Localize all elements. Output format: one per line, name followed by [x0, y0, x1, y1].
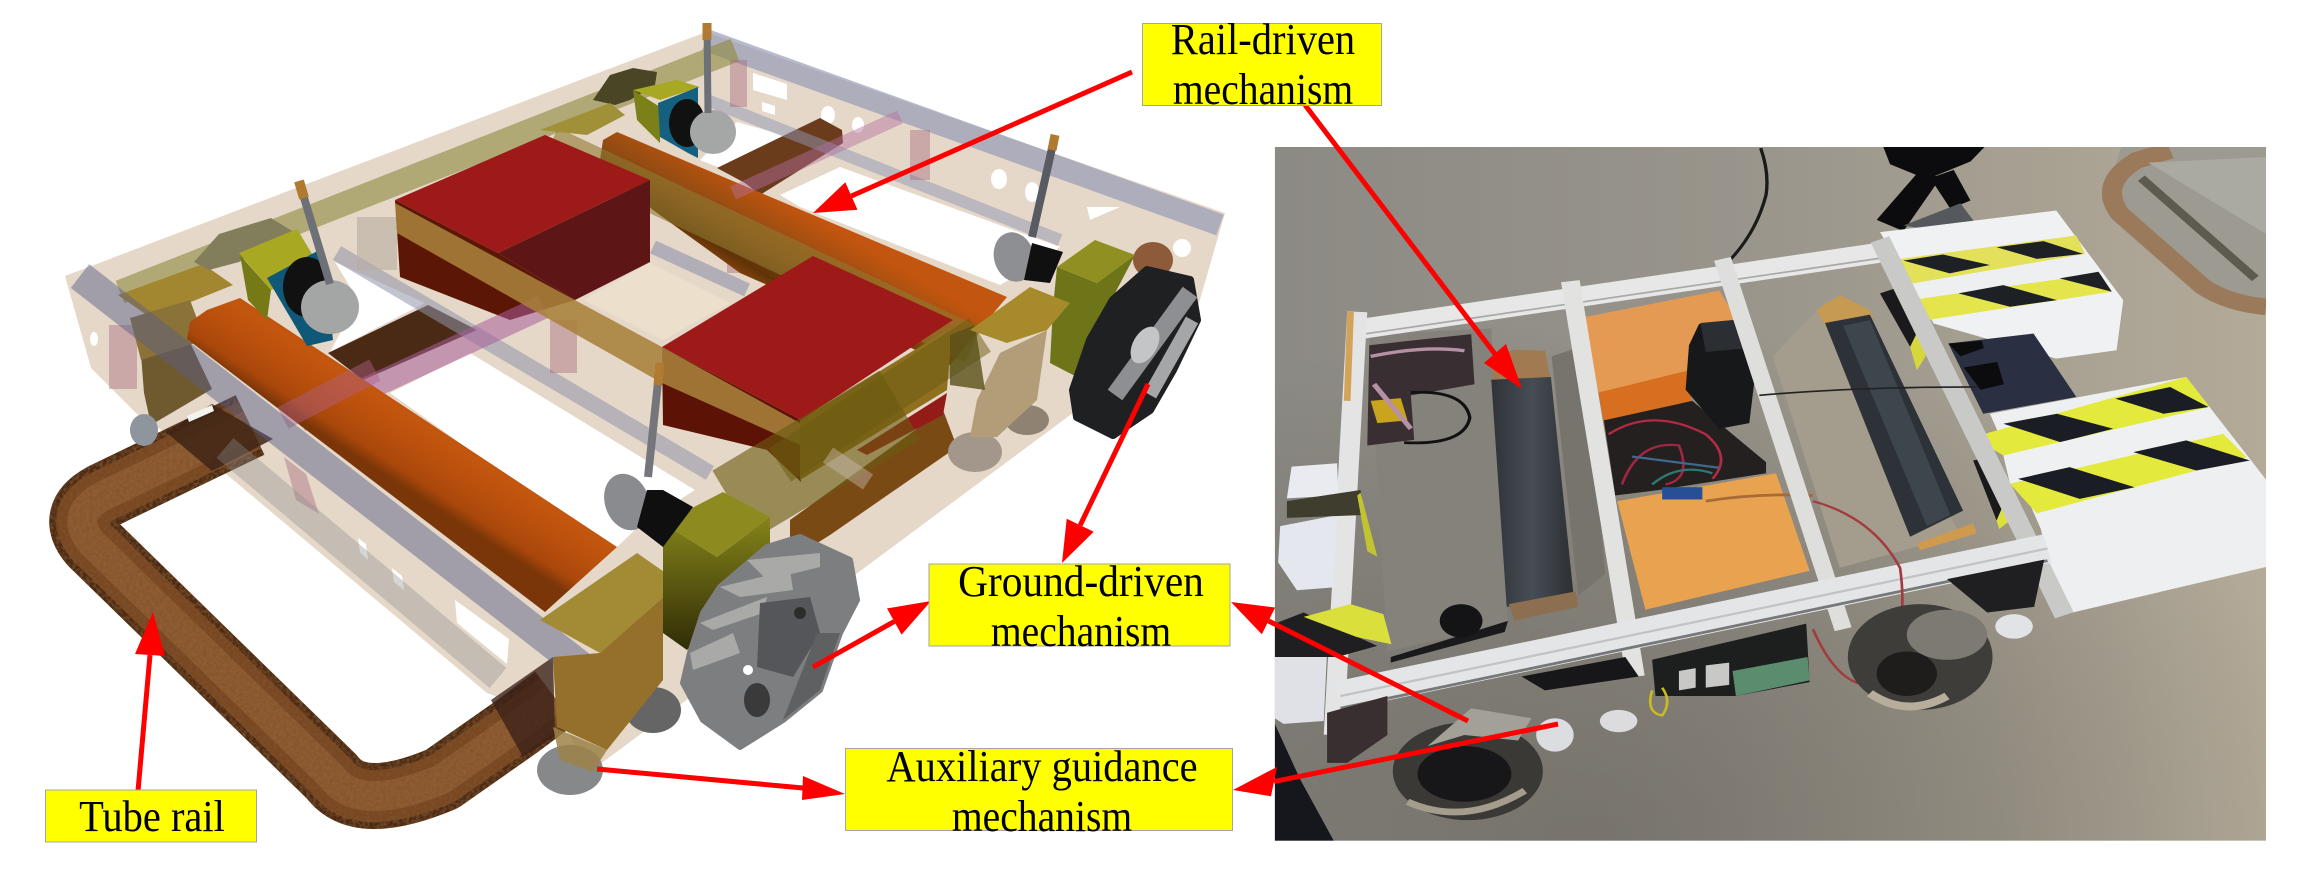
front left blue beam [80, 276, 600, 681]
top motor unit [540, 23, 736, 158]
shaded tube under body [166, 404, 273, 471]
front mecanum wheel [683, 537, 857, 747]
label: Tube rail [46, 790, 256, 842]
label: Ground-driven mechanism: Ground-driven [958, 558, 1204, 606]
pink crossing beams [300, 117, 900, 420]
front cross beam and rail ends [733, 335, 980, 505]
red box 1 [395, 135, 650, 320]
ground background [1275, 147, 2266, 841]
arrow: front wheel to ground-driven [813, 601, 931, 667]
label: Auxiliary guidance mechanism: mechanism [952, 793, 1132, 842]
top right bumper [1880, 210, 2123, 370]
left white blocks [1275, 463, 1391, 724]
panel: photo of the prototype [1275, 147, 2267, 841]
label: Tube rail: Tube rail [79, 792, 225, 841]
red box 2 [662, 256, 953, 482]
wall holes [90, 73, 1191, 664]
translucent body [65, 32, 1225, 770]
arrow: tube rail label to tube [135, 612, 165, 791]
rear tube rail sections [328, 118, 957, 560]
back and interior frame rails [120, 40, 1220, 473]
arrow: guide wheel to auxiliary label [597, 769, 845, 800]
right mecanum wheel [1073, 270, 1197, 435]
tube rail loop [82, 425, 555, 796]
tan cross beam [395, 203, 800, 445]
black cylinder right [1816, 295, 1976, 550]
camera stand [1877, 147, 1985, 231]
arrow: rail-driven to photo cylinder [1305, 105, 1522, 389]
dark ground corner [1275, 724, 1334, 841]
arrow: rail-driven to CAD cylinder [813, 72, 1132, 213]
manhole ring [2110, 147, 2266, 307]
aluminium frame bars [1334, 239, 2064, 735]
pink band on front cylinder [283, 370, 375, 418]
arrow: ground-driven to rear wheel [1062, 384, 1148, 563]
grey upright bar [357, 217, 397, 270]
center light floor [583, 263, 730, 340]
label: Auxiliary guidance mechanism: Auxiliary guidance [886, 742, 1198, 791]
pink upright bars [109, 60, 930, 514]
left lower frame wiring [1327, 696, 1387, 763]
black control device [1686, 320, 1754, 429]
label: Rail-driven mechanism [1142, 15, 1382, 115]
left corner block [118, 264, 233, 446]
right corner block [948, 287, 1070, 472]
darker bay floors [1370, 328, 1605, 596]
right motor unit [988, 135, 1173, 377]
wiring bay [1604, 318, 1813, 501]
right bay floor [1773, 328, 1957, 568]
cable on the ground [1727, 148, 1767, 263]
shaded tube near front corner [491, 657, 555, 757]
label: Ground-driven mechanism [929, 558, 1230, 657]
red power wire [1813, 501, 1902, 685]
label: Rail-driven mechanism: Rail-driven [1171, 15, 1355, 64]
rear orange cylinder [600, 132, 1007, 365]
orange batteries [1583, 291, 1810, 610]
thin black wire across right bay [1759, 387, 1977, 395]
black cylinder left [1491, 350, 1578, 621]
front right motor unit [596, 363, 770, 650]
rear cylinder beam [550, 145, 973, 345]
front corner block [537, 553, 681, 795]
underside electronics [1391, 560, 2044, 752]
left motor unit [194, 181, 359, 346]
left mecanum wheel in photo [1393, 708, 1543, 820]
floor openings [330, 122, 1120, 547]
front orange cylinder [187, 298, 617, 612]
label: Auxiliary guidance mechanism [846, 742, 1232, 842]
right mecanum wheel in photo [1848, 604, 1993, 710]
lower right bumper [1973, 377, 2267, 615]
panel: CAD model of the robot [65, 23, 1225, 796]
rear left wheel [194, 218, 297, 270]
arrow: photo wheel to ground-driven [1231, 602, 1468, 721]
arrow: photo guide wheel to auxiliary label [1233, 724, 1558, 796]
label: Rail-driven mechanism: mechanism [1173, 66, 1353, 115]
black box between bumpers [1948, 334, 2076, 414]
label: Ground-driven mechanism: mechanism [991, 608, 1171, 657]
ground shadow [1275, 437, 2224, 841]
left control wiring [1367, 334, 1475, 445]
